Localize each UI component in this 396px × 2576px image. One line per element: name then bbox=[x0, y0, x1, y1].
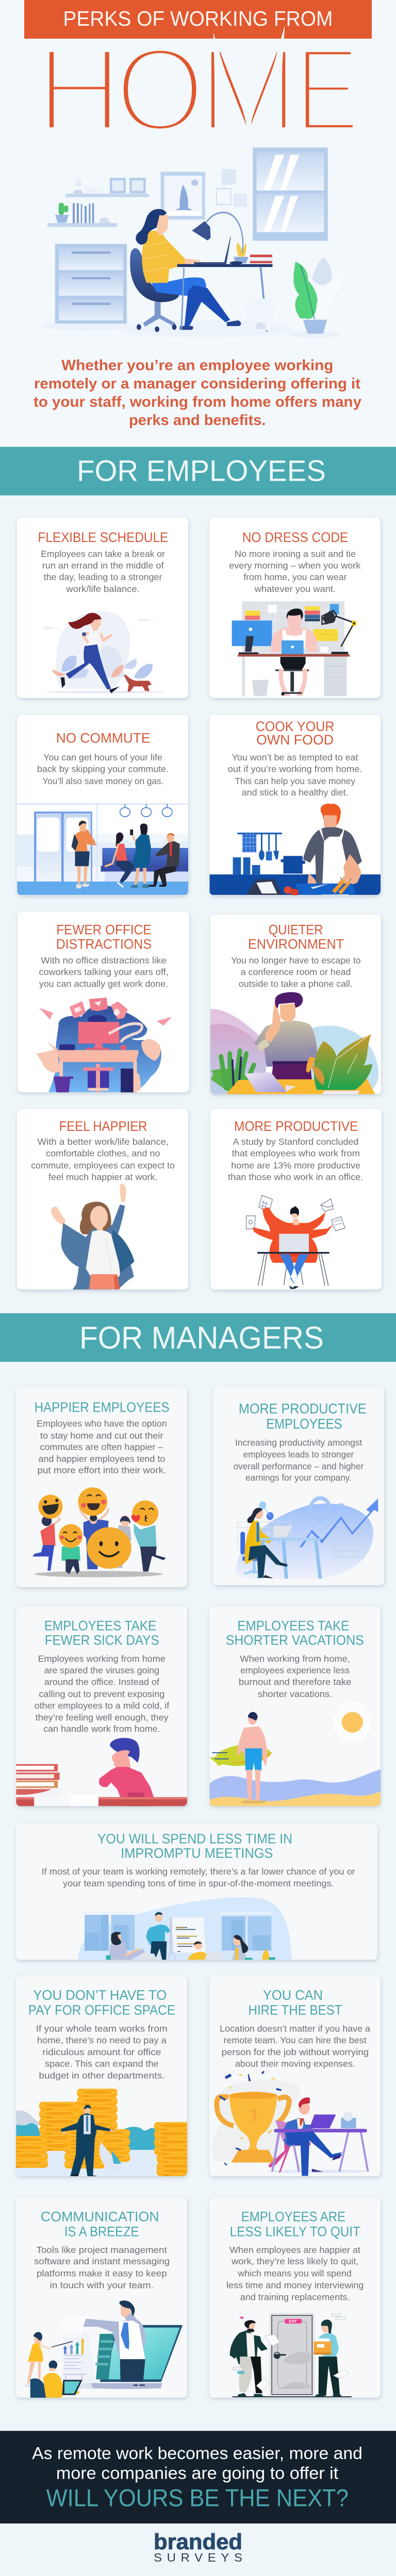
body text: the day, leading to a stronger bbox=[44, 572, 162, 582]
body text: If most of your team is working remotely, there’s a far lower chance of you or bbox=[42, 1867, 355, 1876]
body text: work/life balance. bbox=[65, 584, 140, 594]
heading: FLEXIBLE SCHEDULE bbox=[38, 529, 168, 545]
panel: hire the best bbox=[209, 1977, 381, 2176]
panel: communication is a breeze bbox=[16, 2197, 187, 2398]
heading bbox=[28, 1987, 175, 2018]
heading: YOU CAN bbox=[263, 1987, 323, 2003]
body text: whatever you want. bbox=[254, 584, 336, 594]
heading: MORE PRODUCTIVE bbox=[239, 1401, 367, 1417]
heading: QUIETER bbox=[269, 922, 323, 937]
heading bbox=[249, 1987, 342, 2018]
heading: HAPPIER EMPLOYEES bbox=[35, 1399, 170, 1415]
title banner: PERKS OF WORKING FROM bbox=[63, 7, 333, 30]
panel: fewer sick days bbox=[16, 1606, 188, 1808]
body text: less time and money interviewing bbox=[226, 2280, 364, 2290]
heading: YOU DON’T HAVE TO bbox=[33, 1987, 167, 2003]
icon: woman at desk with rising chart bbox=[236, 1498, 378, 1579]
icon: trophy and man at laptop bbox=[212, 2071, 369, 2176]
heading: SHORTER VACATIONS bbox=[226, 1632, 364, 1648]
title banner bbox=[24, 0, 372, 39]
body text: overall performance – and higher bbox=[234, 1461, 364, 1471]
heading bbox=[256, 719, 335, 748]
section band: for employees: FOR EMPLOYEES bbox=[77, 455, 326, 487]
title word: home bbox=[36, 23, 359, 157]
body text: your team spending tons of time in spur-of-the-moment meetings. bbox=[63, 1878, 334, 1888]
icon: team meeting with presentation board bbox=[78, 1897, 292, 1960]
intro paragraph: perks and benefits. bbox=[129, 412, 266, 429]
panel: no office space costs bbox=[8, 1977, 197, 2184]
closing banner: WILL YOURS BE THE NEXT? bbox=[46, 2484, 349, 2512]
body text: calling out to prevent exposing bbox=[39, 1689, 164, 1699]
heading bbox=[44, 1618, 159, 1648]
body text: remote team. You can hire the best bbox=[224, 2035, 367, 2045]
body text bbox=[239, 1654, 352, 1699]
panel: happier employees bbox=[16, 1386, 187, 1587]
body text: No more ironing a suit and tie bbox=[235, 549, 356, 559]
icon: commuters on a train bbox=[17, 804, 189, 895]
panel: no dress code bbox=[209, 518, 381, 698]
body text: You’ll also save money on gas. bbox=[42, 776, 163, 786]
heading: FEEL HAPPIER bbox=[59, 1118, 147, 1134]
body text: from home, you can wear bbox=[243, 572, 347, 582]
title word: home: E bbox=[295, 23, 359, 156]
logo: branded surveys: SURVEYS bbox=[154, 2551, 242, 2564]
body text bbox=[229, 549, 361, 594]
heading: EMPLOYEES ARE bbox=[241, 2209, 345, 2224]
body text: Location doesn’t matter if you have a bbox=[220, 2024, 370, 2033]
body text: about their moving expenses. bbox=[235, 2059, 355, 2069]
body text bbox=[41, 549, 165, 594]
body text: that employees who work from bbox=[232, 1148, 360, 1159]
body text bbox=[226, 2245, 364, 2302]
body text bbox=[31, 1137, 175, 1182]
body text: earnings for your company. bbox=[245, 1472, 352, 1483]
body text: around the office. Instead of bbox=[44, 1677, 159, 1687]
icon: celebrating businesswoman bbox=[51, 1184, 134, 1290]
body text: If your whole team works from bbox=[36, 2024, 168, 2033]
section band: for managers bbox=[0, 1313, 396, 1362]
intro paragraph: Whether you’re an employee working bbox=[61, 357, 333, 374]
body text bbox=[231, 956, 361, 989]
panel: less likely to quit bbox=[209, 2197, 381, 2398]
body text: back by skipping your commute. bbox=[37, 764, 169, 774]
body text bbox=[220, 2024, 370, 2069]
body text: A study by Stanford concluded bbox=[233, 1137, 359, 1147]
body text: are spared the viruses going bbox=[44, 1665, 159, 1675]
intro paragraph: to your staff, working from home offers many bbox=[34, 394, 362, 410]
body text: than those who work in an office. bbox=[228, 1172, 363, 1182]
icon: sick man at desk with thermometer bbox=[16, 1738, 188, 1808]
icon: woman jogging with dog bbox=[42, 612, 166, 693]
icon: employees leaving through exit door bbox=[230, 2313, 352, 2397]
icon: surfer at the beach bbox=[209, 1712, 381, 1806]
body text: can handle work from home. bbox=[43, 1724, 160, 1734]
heading: DISTRACTIONS bbox=[56, 936, 152, 952]
body text bbox=[228, 1137, 363, 1182]
body text: When working from home, bbox=[240, 1654, 350, 1664]
hero illustration: woman working at a desk at home bbox=[42, 147, 343, 338]
body text: commutes are often happier – bbox=[40, 1442, 163, 1452]
section band: for employees bbox=[0, 447, 396, 496]
heading: NO COMMUTE bbox=[56, 730, 150, 745]
icon: man emerging from laptop presenting to team bbox=[24, 2300, 183, 2398]
heading bbox=[230, 2209, 360, 2239]
heading bbox=[97, 1831, 292, 1861]
heading bbox=[41, 2209, 159, 2239]
icon: man cooking in a kitchen bbox=[209, 804, 381, 895]
body text: run an errand in the middle of bbox=[42, 561, 163, 570]
panel: no commute bbox=[17, 715, 189, 895]
body text: coworkers talking your ears off, bbox=[39, 967, 169, 977]
body text: out if you’re working from home. bbox=[228, 764, 362, 774]
body text: Tools like project management bbox=[37, 2245, 167, 2255]
intro paragraph bbox=[34, 357, 362, 429]
body text: burnout and therefore take bbox=[239, 1677, 352, 1687]
body text: You can get hours of your life bbox=[43, 752, 162, 762]
body text: they’re feeling well enough, they bbox=[36, 1713, 169, 1722]
heading bbox=[56, 922, 152, 952]
body text: You no longer have to escape to bbox=[231, 956, 361, 965]
heading: FEWER SICK DAYS bbox=[45, 1632, 159, 1648]
body text: Increasing productivity amongst bbox=[235, 1437, 362, 1448]
body text: budget in other departments. bbox=[39, 2071, 164, 2081]
body text: a conference room or head bbox=[241, 967, 351, 977]
body text bbox=[36, 2024, 168, 2081]
body text: and stick to a healthy diet. bbox=[242, 788, 348, 798]
body text: every morning – when you work bbox=[229, 561, 361, 570]
body text: home are 13% more productive bbox=[231, 1160, 360, 1171]
closing banner: As remote work becomes easier, more and bbox=[32, 2444, 362, 2463]
body text: other employees to a mild cold, if bbox=[35, 1701, 169, 1710]
body text bbox=[234, 1437, 364, 1483]
section band: for managers: FOR MANAGERS bbox=[79, 1320, 324, 1355]
body text: comfortable clothes, and no bbox=[46, 1148, 160, 1159]
heading: COOK YOUR bbox=[256, 719, 335, 734]
heading: EMPLOYEES TAKE bbox=[237, 1618, 349, 1633]
body text bbox=[35, 1654, 169, 1734]
icon: man on the phone with plants bbox=[210, 992, 378, 1095]
body text: When employees are happier at bbox=[229, 2245, 360, 2255]
body text: employees leads to stronger bbox=[243, 1449, 354, 1460]
panel: flexible schedule bbox=[17, 518, 188, 698]
body text: software and instant messaging bbox=[34, 2257, 170, 2266]
body text: ridiculous amount for office bbox=[42, 2047, 161, 2057]
heading bbox=[248, 922, 344, 952]
icon: trophy and man at laptop: 1 bbox=[250, 2106, 259, 2125]
body text: put more effort into their work. bbox=[37, 1465, 166, 1476]
body text bbox=[228, 752, 362, 798]
heading: PAY FOR OFFICE SPACE bbox=[28, 2002, 175, 2018]
body text bbox=[34, 2245, 170, 2290]
body text: home, there’s no need to pay a bbox=[37, 2035, 167, 2045]
icon: cluttered desk with distractions bbox=[37, 997, 172, 1094]
closing banner: more companies are going to offer it bbox=[56, 2464, 339, 2483]
heading: COMMUNICATION bbox=[41, 2209, 159, 2224]
panel: impromptu meetings bbox=[16, 1823, 377, 1960]
heading bbox=[226, 1618, 364, 1648]
body text: outside to take a phone call. bbox=[239, 979, 353, 989]
panel: cook your own food bbox=[209, 715, 381, 910]
icon: employees leaving through exit door: EXIT bbox=[289, 2320, 297, 2324]
panel: more productive employees bbox=[213, 1386, 384, 1585]
heading bbox=[239, 1401, 367, 1432]
heading: NO DRESS CODE bbox=[242, 529, 348, 545]
body text: Employees can take a break or bbox=[41, 549, 165, 559]
body text: space. This can expand the bbox=[45, 2059, 159, 2069]
panel: quieter environment bbox=[210, 914, 381, 1095]
body text: Employees working from home bbox=[38, 1654, 166, 1664]
body text: You won’t be as tempted to eat bbox=[232, 752, 358, 762]
heading: OWN FOOD bbox=[256, 732, 334, 748]
logo: branded surveys: branded bbox=[154, 2530, 242, 2554]
body text bbox=[37, 1419, 167, 1476]
heading: LESS LIKELY TO QUIT bbox=[230, 2224, 360, 2239]
body text: This can help you save money bbox=[235, 776, 355, 786]
hero background bbox=[0, 0, 396, 447]
heading: IS A BREEZE bbox=[64, 2224, 139, 2239]
heading: IMPROMPTU MEETINGS bbox=[121, 1845, 273, 1861]
title word: home: H bbox=[36, 23, 122, 157]
heading: EMPLOYEES bbox=[266, 1416, 342, 1432]
intro paragraph: remotely or a manager considering offering it bbox=[34, 375, 360, 392]
body text: in touch with your team. bbox=[50, 2280, 154, 2290]
body text: and happier employees tend to bbox=[38, 1454, 166, 1464]
body text: work, they’re less likely to quit, bbox=[231, 2257, 359, 2266]
panel: shorter vacations bbox=[209, 1606, 382, 1809]
body text: With a better work/life balance, bbox=[37, 1137, 169, 1147]
body text: commute, employees can expect to bbox=[31, 1160, 175, 1171]
panel: fewer office distractions bbox=[18, 912, 189, 1094]
icon: businessman among stacks of coins bbox=[8, 2089, 197, 2184]
heading: MORE PRODUCTIVE bbox=[234, 1118, 358, 1134]
icon: man in underwear at his desk bbox=[232, 601, 357, 697]
heading: FEWER OFFICE bbox=[56, 922, 151, 937]
body text: shorter vacations. bbox=[258, 1689, 332, 1699]
icon: people holding smiling emoji faces bbox=[32, 1487, 166, 1577]
title word: home: O bbox=[115, 23, 205, 157]
title word: home: M bbox=[198, 23, 299, 157]
body text: and training replacements. bbox=[240, 2292, 350, 2302]
body text: feel much happier at work. bbox=[48, 1172, 158, 1182]
icon: multi-armed multitasking worker bbox=[246, 1195, 345, 1289]
body text: which means you will spend bbox=[237, 2268, 352, 2278]
body text: you can actually get work done. bbox=[39, 979, 168, 989]
body text: employees experience less bbox=[240, 1665, 350, 1675]
heading: YOU WILL SPEND LESS TIME IN bbox=[97, 1831, 292, 1846]
body text bbox=[42, 1867, 355, 1888]
body text: platforms make it easy to keep bbox=[37, 2268, 167, 2278]
panel: feel happier bbox=[17, 1109, 188, 1306]
heading: EMPLOYEES TAKE bbox=[44, 1618, 156, 1633]
body text: person for the job without worrying bbox=[222, 2047, 369, 2057]
heading: ENVIRONMENT bbox=[248, 936, 344, 952]
body text: With no office distractions like bbox=[41, 956, 167, 965]
body text: Employees who have the option bbox=[37, 1419, 167, 1429]
body text bbox=[39, 956, 169, 989]
body text bbox=[37, 752, 169, 786]
closing banner bbox=[0, 2431, 396, 2523]
panel: more productive bbox=[210, 1109, 382, 1290]
heading: HIRE THE BEST bbox=[249, 2002, 342, 2018]
body text: to stay home and cut out their bbox=[40, 1431, 163, 1440]
